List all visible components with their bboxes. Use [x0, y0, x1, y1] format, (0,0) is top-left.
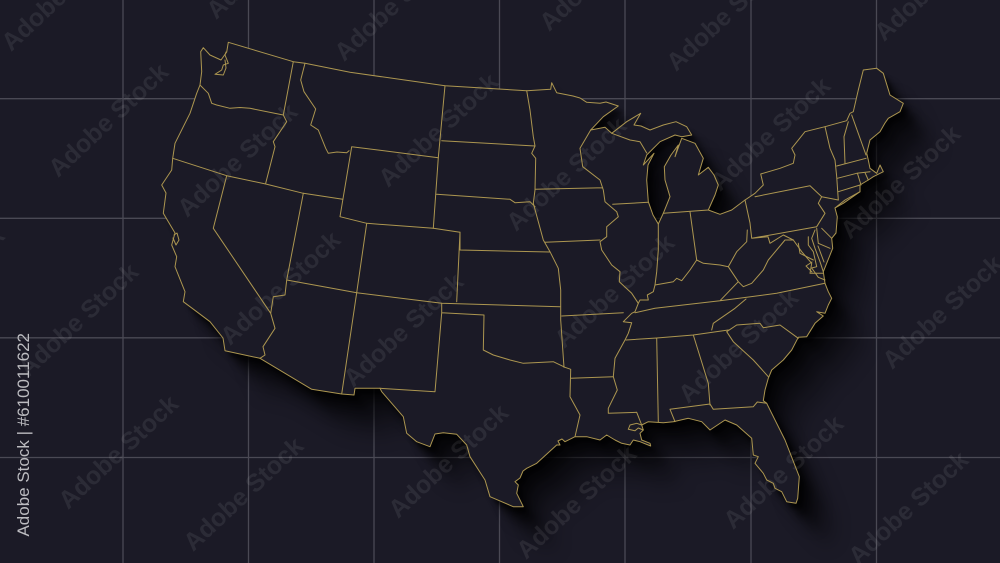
national outline: [162, 42, 903, 507]
watermarks: Adobe Stock: [178, 432, 309, 556]
mid-atlantic borders: [745, 186, 838, 280]
Pacific northwest borders: [173, 52, 349, 199]
watermarks: Adobe Stock: [13, 258, 144, 382]
watermarks: Adobe Stock: [215, 226, 346, 350]
upper midwest borders: [527, 91, 708, 425]
watermarks: Adobe Stock: [172, 98, 303, 222]
watermarks: Adobe Stock: [43, 58, 174, 182]
watermarks: Adobe Stock: [718, 410, 849, 534]
watermarks: Adobe Stock: [511, 440, 642, 563]
watermarks: Adobe Stock: [673, 284, 804, 408]
south central borders: [562, 313, 767, 431]
watermarks: Adobe Stock: [53, 390, 184, 514]
land mass: [162, 42, 903, 507]
Rockies to plains borders: [380, 86, 580, 437]
western interior borders: [173, 147, 560, 394]
watermarks: Adobe Stock: [501, 112, 632, 236]
southeast borders: [635, 230, 825, 377]
watermarks: Adobe Stock: [373, 68, 504, 192]
watermarks: Adobe Stock: [338, 268, 469, 392]
state borders: [162, 42, 903, 507]
watermarks: Adobe Stock: [549, 229, 680, 353]
watermarks: Adobe Stock: [383, 399, 514, 523]
watermarks: Adobe Stock: [835, 120, 966, 244]
map drop shadow: [167, 48, 938, 549]
new england borders: [825, 115, 870, 208]
watermarks: Adobe Stock: [705, 72, 836, 196]
stock id caption: Adobe Stock | #610011622: [14, 333, 33, 537]
